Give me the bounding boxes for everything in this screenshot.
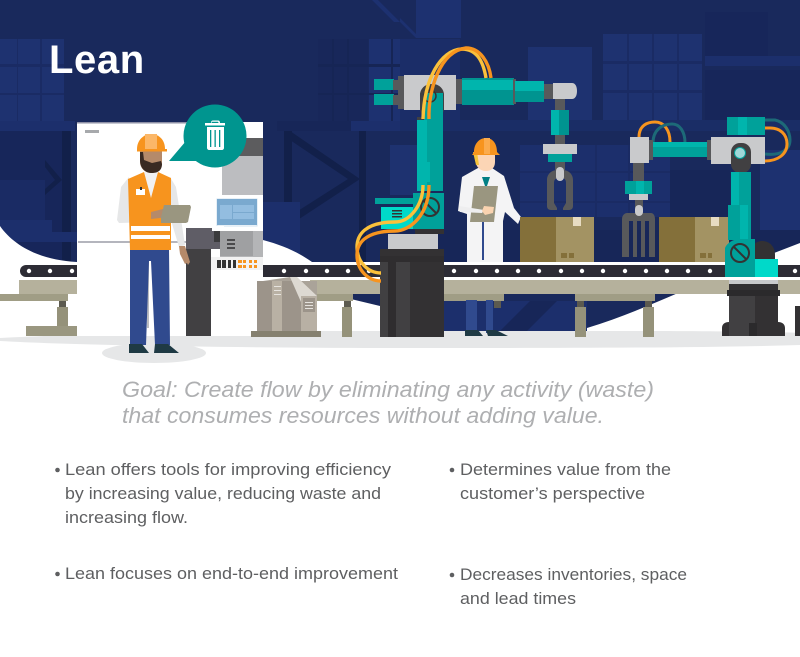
floor [0, 331, 800, 348]
machine: white cabinet and control unit [77, 122, 263, 336]
conveyor: main section [263, 262, 800, 337]
person: worker in orange vest [102, 134, 206, 363]
bullet list: right column: customer’s perspective [460, 484, 645, 503]
goal statement: Goal: Create flow by eliminating any activity (waste) [122, 377, 654, 402]
goal statement: that consumes resources without adding value. [122, 403, 604, 428]
icon: speech bubble with trash can [169, 104, 246, 168]
bullet list: right column: Determines value from the [460, 460, 671, 479]
robot arm: left [357, 48, 577, 337]
panel: warehouse background [0, 0, 800, 345]
goal statement [122, 377, 654, 428]
robot arm: right [622, 117, 800, 336]
boxes on conveyor [520, 217, 729, 262]
bullet list: right column: Decreases inventories, space [460, 565, 687, 584]
person: woman in lab coat [458, 138, 521, 336]
bullet list: left column: Lean offers tools for improving efficiency [65, 460, 392, 479]
conveyor: left section [0, 265, 186, 336]
bullet list: right column [450, 460, 687, 608]
title: Lean [49, 38, 145, 82]
bullet list: left column: increasing flow. [65, 508, 188, 527]
bullet list: right column: and lead times [460, 589, 576, 608]
machine: grey box unit [251, 277, 321, 337]
bullet list: left column: by increasing value, reducing waste and [65, 484, 381, 503]
bullet list: left column: Lean focuses on end-to-end improvement [65, 564, 398, 583]
panel: white wave shapes [0, 226, 800, 657]
bullet list: left column [55, 460, 398, 583]
